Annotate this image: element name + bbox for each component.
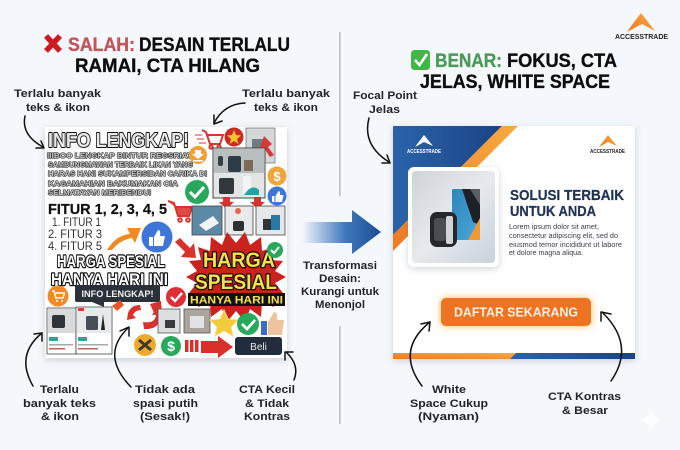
product: watch — [430, 212, 457, 247]
text block: teks padat — [47, 151, 207, 197]
text block: lorem — [509, 222, 622, 257]
logo: accesstrade header: ACCESSTRADE — [615, 32, 668, 41]
heading: benar — [411, 50, 617, 93]
bar: orange — [393, 353, 516, 359]
label: terlalu banyak bawah: Terlalu — [40, 384, 79, 396]
panel: desain benar — [393, 126, 635, 359]
icon: orange arrow — [107, 228, 141, 250]
icon: red cart top — [195, 130, 223, 149]
arrow: label kiri atas — [24, 116, 44, 148]
icon: sparkle — [640, 408, 662, 432]
card: product image — [408, 167, 499, 267]
logo: white: ACCESSTRADE — [407, 149, 442, 155]
label: cta kontras: & Besar — [562, 405, 609, 417]
text block: lorem: eiusmod temor incididunt ut labore — [509, 240, 622, 249]
icon: download — [189, 146, 207, 164]
text block: fitur: 4. FITUR 5 — [48, 241, 102, 253]
label: terlalu banyak kiri: Terlalu banyak — [14, 88, 102, 100]
divider bottom — [339, 326, 340, 424]
text block: harga spesial: HARGA SPESIAL — [57, 252, 165, 271]
button: info lengkap — [75, 285, 160, 307]
icon: green dollar — [161, 336, 181, 356]
label: terlalu banyak bawah — [23, 384, 96, 423]
text block: teks padat: SAMBUNGMAWAN TERBAIK LIKAN YANG — [48, 160, 193, 169]
label: tidak ada spasi: (Sesak!) — [140, 411, 190, 423]
button: daftar sekarang: DAFTAR SEKARANG — [454, 306, 578, 320]
card: product one — [47, 308, 76, 354]
label: tidak ada spasi: spasi putih — [133, 398, 198, 410]
label: cta kontras: CTA Kontras — [548, 391, 621, 403]
icon: blue thumb — [142, 222, 172, 252]
product cards — [47, 307, 112, 354]
heading: salah: DESAIN TERLALU — [139, 34, 290, 56]
icon: green check — [237, 313, 259, 335]
heading: salah — [46, 34, 290, 77]
text block: transformasi: Kurangi untuk — [301, 286, 380, 298]
arrow: terlalu banyak bawah — [26, 333, 42, 386]
button: beli — [235, 337, 282, 355]
heading: solusi: UNTUK ANDA — [510, 203, 596, 220]
photo: top right — [246, 128, 275, 163]
icon: red cart — [168, 201, 192, 222]
badge: starburst harga spesial: SPESIAL — [195, 271, 277, 294]
photo: thumbnails — [192, 206, 285, 235]
label: terlalu banyak bawah: banyak teks — [23, 398, 96, 410]
icon: dollar — [268, 166, 286, 186]
label: focal point: Focal Point — [353, 90, 417, 102]
text block: transformasi — [301, 260, 380, 311]
button: info lengkap: INFO LENGKAP! — [82, 289, 154, 300]
shape: blue corner — [393, 126, 502, 235]
icon: yellow star — [210, 310, 238, 336]
text block: teks padat: KAGAMAHIAN BAKUMAKAN OIA — [48, 179, 179, 188]
text block: fitur: 2. FITUR 3 — [48, 229, 102, 241]
icon: red cross — [46, 36, 60, 51]
text block: teks padat: SELMATAYAN MERIBENDUI — [48, 188, 151, 197]
icon: red check — [166, 287, 186, 307]
heading: benar: BENAR: — [435, 50, 502, 72]
label: cta kecil: & Tidak — [245, 398, 290, 410]
heading: solusi: SOLUSI TERBAIK — [510, 187, 624, 204]
text block: transformasi: Transformasi — [303, 260, 377, 272]
text block: fitur — [48, 201, 167, 253]
heading: benar: FOKUS, CTA — [507, 50, 617, 72]
label: cta kecil: Kontras — [244, 411, 290, 423]
logo: white — [407, 135, 442, 155]
icon: red arrow right — [185, 336, 233, 358]
text block: fitur: 1. FITUR 1 — [52, 217, 101, 229]
logo: accesstrade header — [615, 13, 668, 41]
icon: red swirl arrows — [112, 300, 164, 329]
label: white space — [410, 384, 488, 423]
arrow: label kanan atas — [214, 103, 245, 124]
label: tidak ada spasi: Tidak ada — [135, 384, 196, 396]
icon: green dollar: $ — [167, 338, 175, 354]
divider top — [339, 32, 340, 196]
text block: teks padat: HARAS HANI SUKAMPERSIDAN CARIKA DI — [48, 169, 207, 178]
bar: blue — [510, 353, 635, 359]
photo: bottom thumbnails — [158, 309, 210, 333]
label: white space: Space Cukup — [410, 398, 488, 410]
arrow: white space — [410, 322, 430, 386]
text block: lorem: consectetur adipiscing elit, sed do — [509, 231, 618, 240]
text block: harga spesial: HANYA HARI INI — [51, 270, 168, 289]
icon: green check top small — [267, 242, 283, 258]
label: white space: White — [432, 384, 466, 396]
label: cta kontras — [548, 391, 621, 417]
icon: star badge — [224, 128, 244, 146]
label: focal point: Jelas — [369, 104, 400, 116]
button: daftar sekarang — [441, 298, 591, 326]
button: beli: Beli — [250, 342, 267, 353]
text block: harga spesial — [51, 252, 168, 289]
card: product two — [76, 307, 112, 354]
label: terlalu banyak kiri: teks & ikon — [26, 102, 90, 114]
label: white space: (Nyaman) — [418, 411, 479, 423]
icon: badge bottom — [134, 334, 156, 356]
text block: lorem: Lorem ipsum dolor sit amet, — [509, 222, 599, 231]
photo: collage large — [213, 148, 265, 198]
badge: starburst harga spesial: HANYA HARI INI — [190, 294, 283, 306]
icon: orange cart circle — [48, 286, 68, 306]
label: tidak ada spasi — [133, 384, 198, 423]
text block: lorem: et dolore magna aliqua. — [509, 248, 583, 257]
icon: thumbs up hand — [261, 312, 284, 335]
logo: orange: ACCESSTRADE — [590, 149, 626, 155]
text block: transformasi: Desain: — [319, 273, 361, 285]
heading: salah: RAMAI, CTA HILANG — [75, 55, 260, 77]
badge: starburst harga spesial: HARGA — [203, 249, 275, 272]
icon: blue thumb small — [268, 186, 286, 206]
label: cta kecil: CTA Kecil — [239, 384, 295, 396]
label: terlalu banyak kanan — [242, 88, 331, 114]
label: cta kecil — [239, 384, 295, 423]
arrow: cta kontras — [601, 312, 622, 381]
icon: green check — [411, 50, 430, 70]
shape: orange stripe — [393, 126, 518, 251]
text block: fitur: FITUR 1, 2, 3, 4, 5 — [48, 201, 167, 218]
arrow: transformasi — [302, 210, 381, 254]
label: terlalu banyak kanan: teks & ikon — [254, 102, 318, 114]
label: terlalu banyak kanan: Terlalu banyak — [242, 88, 331, 100]
label: focal point — [353, 90, 417, 116]
icon: green check large — [185, 180, 209, 204]
product: phone — [452, 189, 480, 240]
heading: salah: SALAH: — [68, 34, 135, 56]
text block: transformasi: Menonjol — [315, 299, 365, 311]
arrow: cta kecil — [285, 352, 296, 380]
arrow: spasi putih — [115, 327, 131, 387]
icon: red arrows down — [219, 197, 265, 209]
heading: solusi — [510, 187, 624, 220]
text block: teks padat: IIIBOO LENGKAP BINTUR REGSRIAT — [47, 151, 192, 160]
label: terlalu banyak kiri — [14, 88, 102, 114]
icon: dollar: $ — [273, 169, 281, 184]
heading: info lengkap: INFO LENGKAP! — [48, 130, 189, 152]
panel: desain salah — [45, 127, 287, 358]
label: terlalu banyak bawah: & ikon — [41, 411, 79, 423]
icon: red arrow diagonal — [175, 238, 196, 258]
logo: orange — [590, 135, 626, 155]
arrow: focal point — [368, 118, 390, 163]
badge: starburst harga spesial — [186, 232, 286, 322]
heading: benar: JELAS, WHITE SPACE — [420, 71, 610, 93]
